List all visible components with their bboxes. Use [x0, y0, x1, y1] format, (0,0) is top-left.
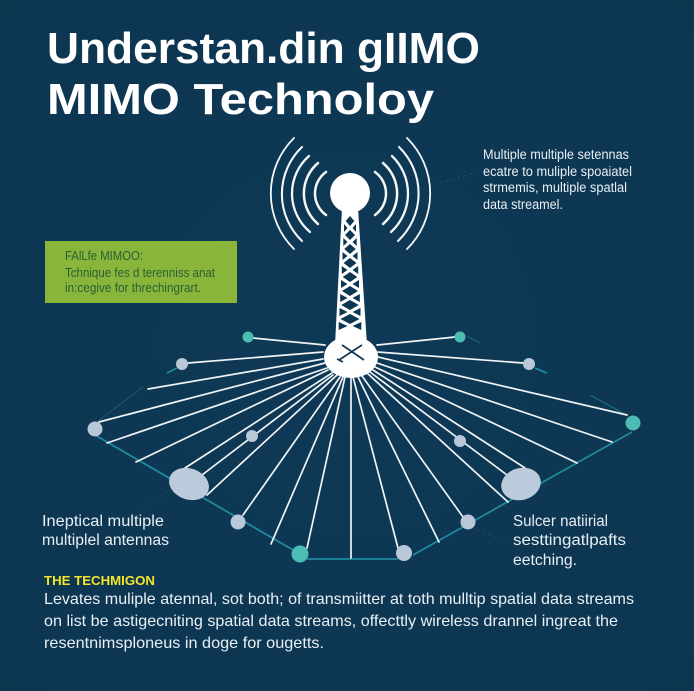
text block: description: [44, 591, 634, 652]
text block: spatial streams note: strmemis, multiple spatlal: [483, 180, 627, 195]
icon: signal waves: [271, 138, 430, 249]
panel: green callout: Tchnique fes d terenniss anat: [65, 265, 215, 280]
text block: spatial streams note: ecatre to muliple spoaiatel: [483, 164, 632, 179]
network floor edges: [95, 173, 632, 559]
text block: description: Levates muliple atennal, sot both; of transmiitter at toth mulltip spatial data streams: [44, 591, 634, 608]
label: left antennas: multiplel antennas: [42, 532, 169, 549]
label: left antennas: [42, 513, 169, 549]
text block: description: on list be astigecniting spatial data streams, offecttly wireless drannel ingreat the: [44, 613, 618, 630]
label: left antennas: Ineptical multiple: [42, 513, 164, 530]
title: Understan.din gIIMO: [47, 24, 480, 73]
text block: spatial streams note: Multiple multiple setennas: [483, 147, 629, 162]
antenna nodes: [88, 332, 640, 562]
panel: green callout: [45, 241, 237, 303]
signal beams from hub: [99, 337, 627, 558]
label: right antennas: [513, 513, 626, 569]
text block: spatial streams note: data streamel.: [483, 197, 563, 212]
panel: green callout: in:cegive for threchingrart.: [65, 280, 201, 295]
label: right antennas: sesttingatlpafts: [513, 532, 626, 549]
title: [47, 24, 480, 124]
label: right antennas: Sulcer natiirial: [513, 513, 608, 530]
title: MIMO Technoloy: [47, 75, 435, 124]
heading: yellow section label: THE TECHMIGON: [44, 573, 155, 588]
label: right antennas: eetching.: [513, 552, 577, 569]
icon: antenna tower: [324, 173, 378, 378]
panel: green callout: FAlLfe MIMOO:: [65, 248, 143, 263]
text block: description: resentnimsploneus in doge for ougetts.: [44, 635, 324, 652]
text block: spatial streams note: [483, 147, 632, 212]
